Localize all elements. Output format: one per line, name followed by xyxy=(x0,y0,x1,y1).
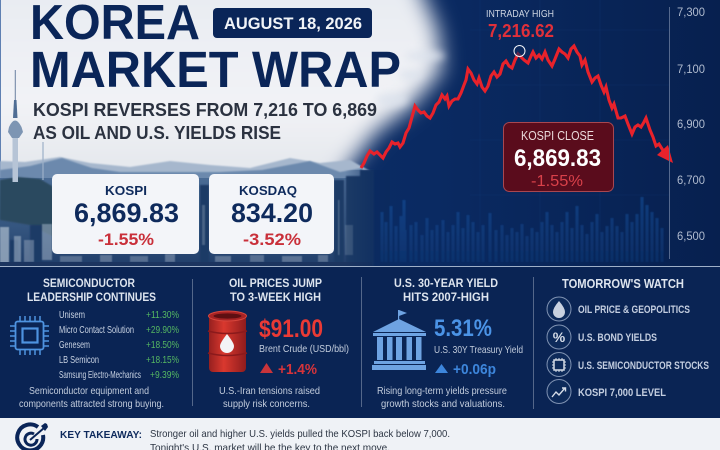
panel: tomorrow's watch xyxy=(547,277,709,404)
callout: intraday high: INTRADAY HIGH xyxy=(486,8,554,20)
stock gainers table: +18.15% xyxy=(146,354,179,366)
stock gainers table: +18.50% xyxy=(146,339,179,351)
watch item: bonds: U.S. BOND YIELDS xyxy=(578,332,657,344)
yield figures: +0.06p xyxy=(453,361,496,378)
bottom band xyxy=(0,266,720,418)
subheading: KOSPI REVERSES FROM 7,216 TO 6,869 xyxy=(33,100,377,120)
oil price figures: Brent Crude (USD/bbl) xyxy=(259,343,349,355)
date badge xyxy=(213,8,372,38)
icon: oil barrel xyxy=(208,311,247,372)
stock gainers table: LB Semicon xyxy=(59,354,99,366)
oil heading: TO 3-WEEK HIGH xyxy=(230,290,321,304)
yield note xyxy=(377,385,507,410)
card: KOSPI: 6,869.83 xyxy=(74,198,179,228)
oil heading xyxy=(229,276,322,304)
callout: intraday high: 7,216.62 xyxy=(488,21,554,41)
right fade xyxy=(345,170,390,266)
yield figures: U.S. 30Y Treasury Yield xyxy=(434,344,523,356)
card: KOSDAQ: -3.52% xyxy=(243,230,301,249)
yield note: growth stocks and valuations. xyxy=(381,398,505,410)
line chart: KOSPI intraday xyxy=(361,46,673,168)
watch heading: TOMORROW'S WATCH xyxy=(562,277,684,291)
stock gainers table: Micro Contact Solution xyxy=(59,324,134,336)
takeaway text: Stronger oil and higher U.S. yields pulled the KOSPI back below 7,000. xyxy=(150,428,450,440)
oil price figures: $91.00 xyxy=(259,315,323,343)
icon: chip small xyxy=(547,352,571,376)
y axis: 6,700 xyxy=(677,175,705,187)
oil price figures: +1.4% xyxy=(278,361,317,378)
icon: percent xyxy=(547,325,571,349)
callout: intraday high xyxy=(486,8,554,41)
callout: KOSPI close: 6,869.83 xyxy=(514,145,601,172)
yield heading: HITS 2007-HIGH xyxy=(403,290,489,304)
stock gainers table: +11.30% xyxy=(146,309,179,321)
subheading: AS OIL AND U.S. YIELDS RISE xyxy=(33,123,281,143)
title xyxy=(30,0,401,98)
card: KOSPI xyxy=(52,174,199,254)
semiconductor heading xyxy=(27,276,156,304)
stock gainers table: Samsung Electro-Mechanics xyxy=(59,369,141,381)
volume bars xyxy=(382,197,662,262)
card: KOSPI: -1.55% xyxy=(98,230,154,249)
icon: trend line xyxy=(547,380,571,404)
hero background xyxy=(0,0,720,268)
y axis: 7,100 xyxy=(677,64,705,76)
subheading xyxy=(33,100,377,143)
semiconductor heading: LEADERSHIP CONTINUES xyxy=(27,290,156,304)
watch item: oil: OIL PRICE & GEOPOLITICS xyxy=(578,304,690,316)
callout: KOSPI close: -1.55% xyxy=(531,173,583,190)
date badge: AUGUST 18, 2026 xyxy=(224,15,362,33)
icon: treasury building xyxy=(372,310,426,370)
card: KOSDAQ: 834.20 xyxy=(231,198,313,228)
oil note: supply risk concerns. xyxy=(223,398,310,410)
yield heading: U.S. 30-YEAR YIELD xyxy=(394,276,498,290)
semiconductor note xyxy=(19,385,164,410)
semiconductor note: Semiconductor equipment and xyxy=(29,385,149,397)
callout: KOSPI close: KOSPI CLOSE xyxy=(521,129,594,143)
takeaway text xyxy=(150,428,450,450)
oil note: U.S.-Iran tensions raised xyxy=(219,385,320,397)
oil note xyxy=(219,385,320,410)
stock gainers table: +9.39% xyxy=(150,369,179,381)
stock gainers table: Unisem xyxy=(59,309,85,321)
icon: percent: % xyxy=(553,329,566,345)
yield figures xyxy=(434,315,523,378)
icon: Seoul tower xyxy=(8,70,44,182)
stock gainers table: +29.90% xyxy=(146,324,179,336)
semiconductor note: components attracted strong buying. xyxy=(19,398,164,410)
yield note: Rising long-term yields pressure xyxy=(377,385,507,397)
icon: oil drop xyxy=(547,297,571,321)
panel: oil xyxy=(208,276,349,410)
panel: US yield xyxy=(372,276,523,410)
oil price figures xyxy=(259,315,349,378)
key takeaway band xyxy=(0,418,720,450)
takeaway label: KEY TAKEAWAY: xyxy=(60,429,142,441)
y axis: 6,900 xyxy=(677,119,705,131)
card: KOSDAQ: KOSDAQ xyxy=(239,183,297,198)
mountains and Seoul skyline xyxy=(0,157,374,268)
y axis: 6,500 xyxy=(677,231,705,243)
y axis: 7,300 xyxy=(677,7,705,19)
stock gainers table: Genesem xyxy=(59,339,90,351)
semiconductor heading: SEMICONDUCTOR xyxy=(43,276,135,290)
oil heading: OIL PRICES JUMP xyxy=(229,276,322,290)
card: KOSPI: KOSPI xyxy=(105,183,147,198)
callout: KOSPI close xyxy=(504,122,614,192)
panel: semiconductor xyxy=(10,276,179,410)
yield figures: 5.31% xyxy=(434,315,492,342)
card: KOSDAQ xyxy=(209,174,334,254)
icon: target xyxy=(17,423,48,450)
title: MARKET WRAP xyxy=(30,41,401,98)
yield heading xyxy=(394,276,498,304)
watch item: KOSPI level: KOSPI 7,000 LEVEL xyxy=(578,387,666,399)
y axis xyxy=(669,7,705,259)
icon: chip xyxy=(10,316,49,355)
stock gainers table xyxy=(59,309,179,381)
